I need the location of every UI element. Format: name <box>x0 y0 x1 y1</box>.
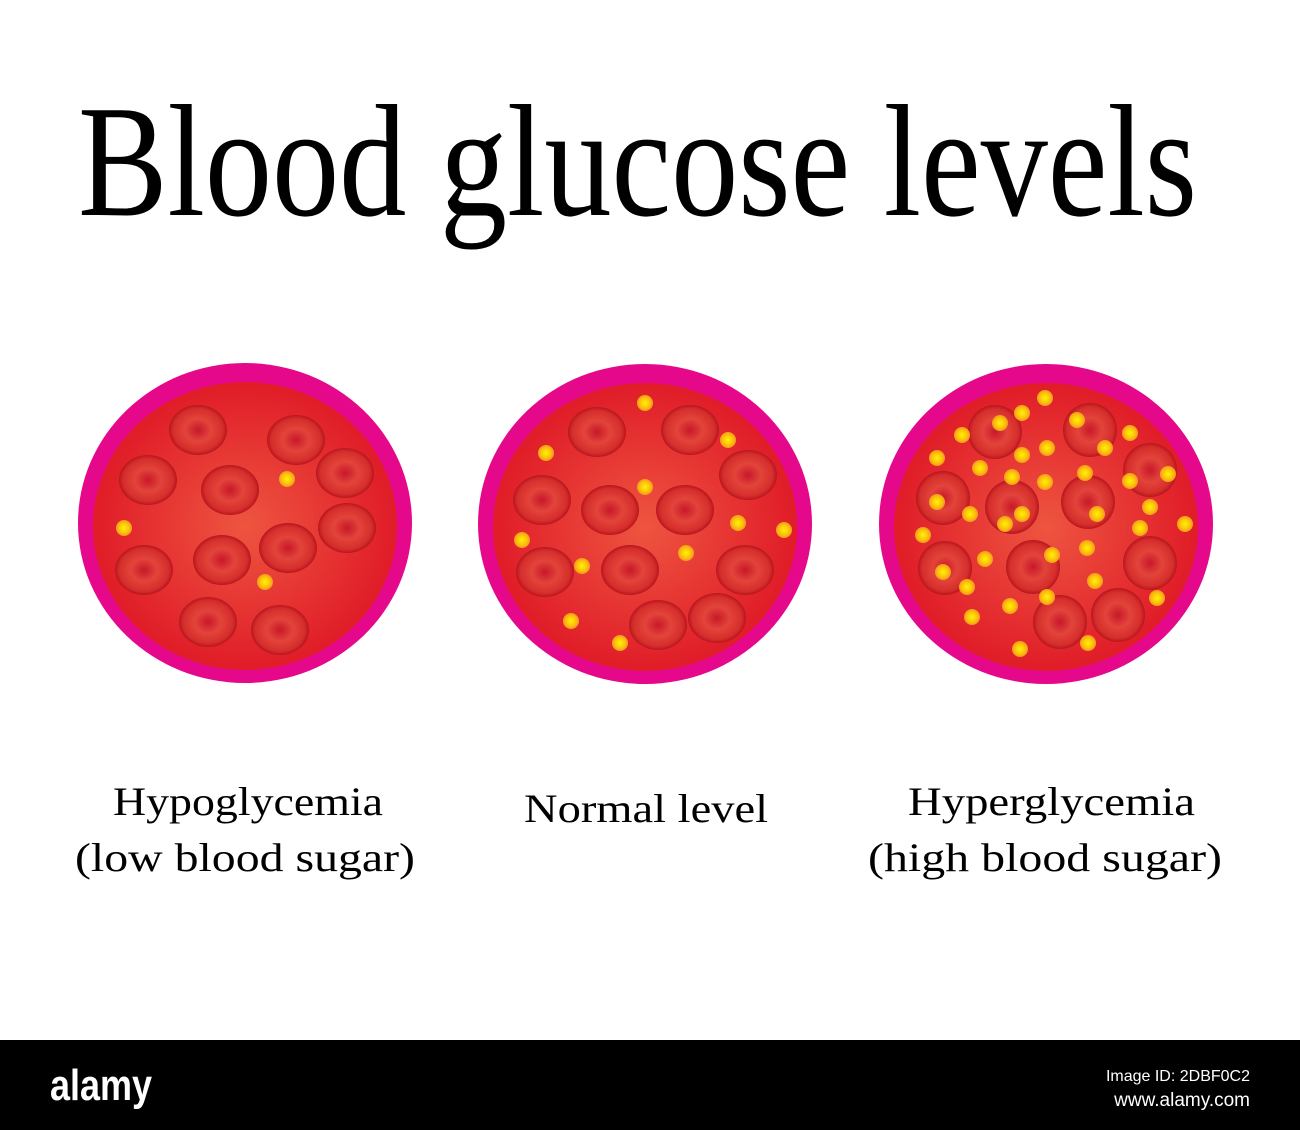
panel: normal <box>478 364 812 684</box>
footer bar: www.alamy.com <box>1113 1090 1250 1111</box>
label: low blood sugar: (low blood sugar) <box>75 835 415 880</box>
panel: hypoglycemia <box>78 363 412 683</box>
footer bar: Image ID: 2DBF0C2 <box>1106 1068 1250 1085</box>
footer bar: alamy <box>50 1061 152 1110</box>
label: high blood sugar: (high blood sugar) <box>868 835 1222 880</box>
panel: hyperglycemia <box>879 364 1213 684</box>
label: hypoglycemia: Hypoglycemia <box>113 779 383 824</box>
footer bar <box>0 1040 1300 1130</box>
label: hyperglycemia: Hyperglycemia <box>908 779 1195 824</box>
label: normal level: Normal level <box>524 786 768 831</box>
